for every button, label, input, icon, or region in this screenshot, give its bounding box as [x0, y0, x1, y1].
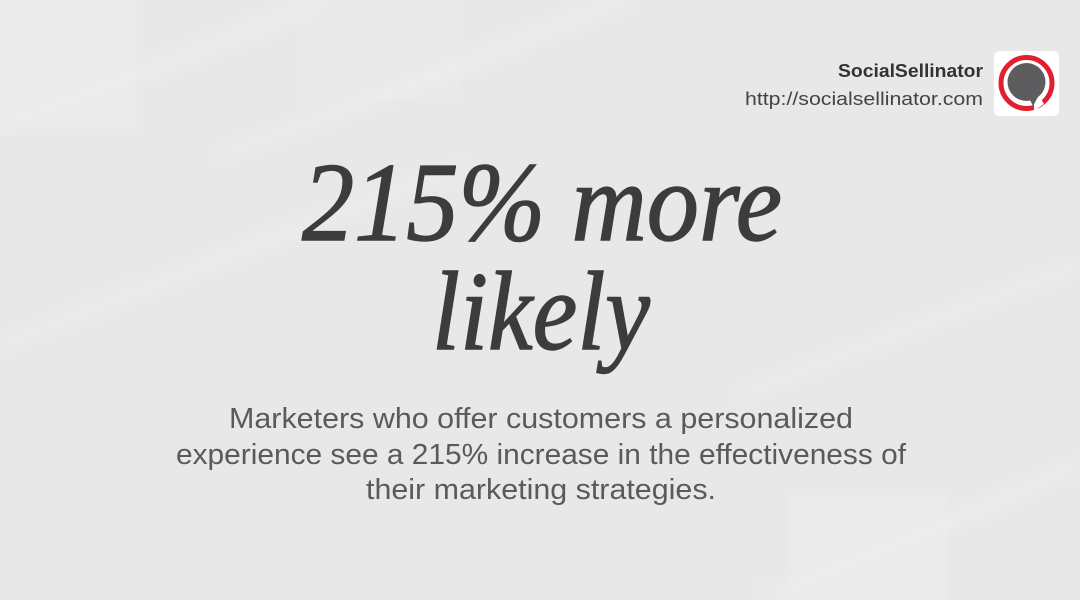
description text: [176, 403, 907, 506]
icon: SocialSellinator logo: [994, 51, 1059, 116]
description line 1: Marketers who offer customers a personalized: [229, 403, 853, 435]
title line 2: likely: [432, 250, 650, 374]
description line 3: their marketing strategies.: [366, 474, 716, 506]
title line 1: 215% more: [302, 141, 782, 265]
brand URL: http://socialsellinator.com: [745, 88, 983, 109]
title: [302, 141, 782, 374]
brand name: SocialSellinator: [838, 61, 983, 81]
description line 2: experience see a 215% increase in the effectiveness of: [176, 439, 907, 471]
